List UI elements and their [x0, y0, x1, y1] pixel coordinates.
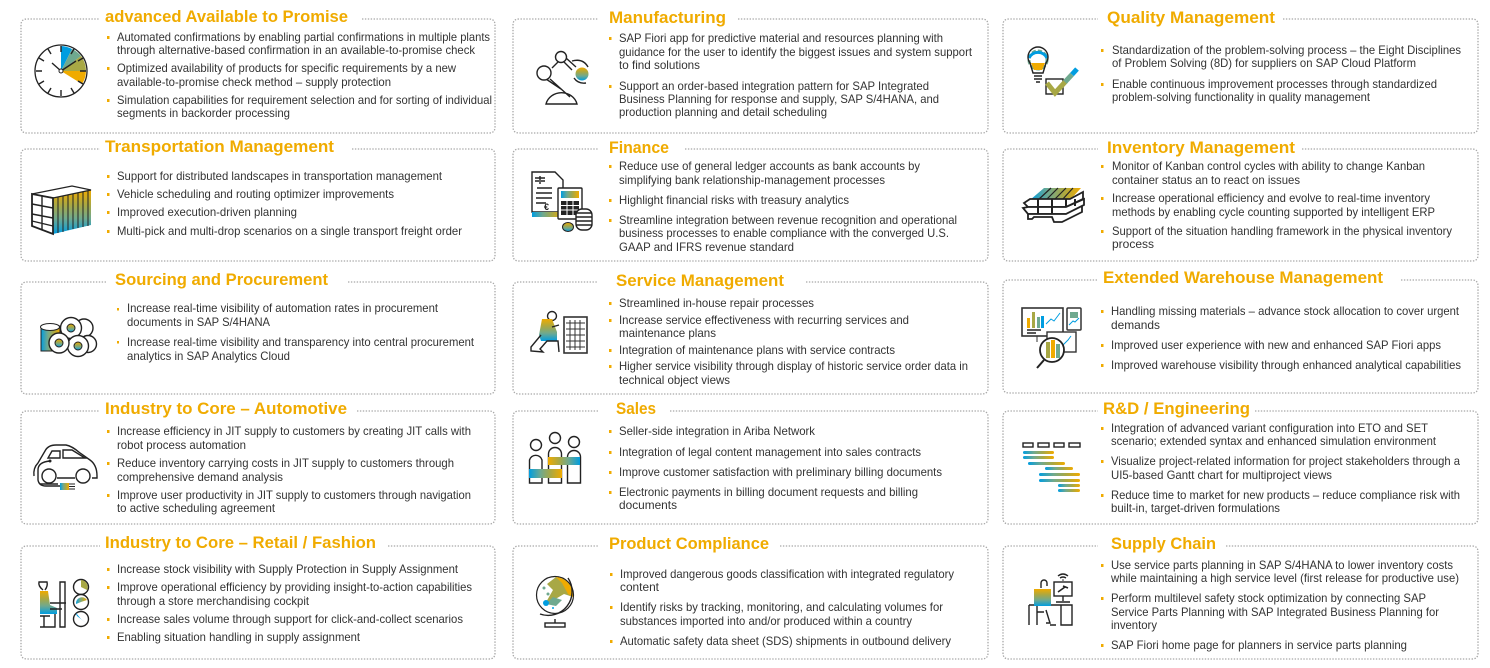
text block: Supply Chain bullets: Service Parts Planning with SAP Integrated Business Planning for [1111, 605, 1439, 619]
text block: Product Compliance bullets: substances imported into and/or produced within a country [620, 614, 912, 628]
text block: Service Management bullets: Increase service effectiveness with recurring services and [619, 313, 909, 327]
icon: technician and server rack [531, 312, 587, 353]
text block: Automotive bullets: to active scheduling agreement [117, 501, 276, 515]
panel: Finance [513, 138, 988, 261]
text block: Sourcing and Procurement bullets [117, 301, 475, 363]
panel: R&D / Engineering [1003, 399, 1478, 524]
text block: Automotive bullets: Improve user productivity in JIT supply to customers through navigation [117, 488, 471, 502]
text block: advanced Available to Promise bullets [107, 30, 492, 120]
text block: Transportation Management bullets: Improved execution-driven planning [117, 205, 297, 219]
icon: clock [35, 45, 87, 97]
panel: Industry to Core – Retail / Fashion [21, 533, 495, 659]
text block: Retail / Fashion bullets: Increase stock visibility with Supply Protection in Supply Assignment [117, 562, 459, 576]
text block: R&D / Engineering bullets [1101, 421, 1460, 515]
text block: Extended Warehouse Management bullets: Improved warehouse visibility through enhanced analytical capabilities [1111, 358, 1461, 372]
heading: Supply Chain: Supply Chain [1111, 534, 1216, 553]
heading: Manufacturing: Manufacturing [609, 8, 726, 27]
text block: Supply Chain bullets: Use service parts planning in SAP S/4HANA to lower inventory costs [1111, 558, 1453, 572]
text block: Sales bullets: Improve customer satisfaction with preliminary billing documents [619, 465, 942, 479]
panel: Supply Chain [1003, 534, 1478, 659]
text block: Extended Warehouse Management bullets: demands [1111, 318, 1160, 332]
text block: Retail / Fashion bullets: Improve operational efficiency by providing insight-to-action capabilities [117, 580, 472, 594]
icon: light bulb and check mark [1028, 47, 1077, 94]
heading: Extended Warehouse Management: Extended Warehouse Management [1103, 268, 1383, 287]
text block: Supply Chain bullets: while maintaining a high service level (first release for productive use) [1110, 571, 1459, 585]
text block: Service Management bullets: Higher service visibility through display of historic service order data in [619, 359, 968, 373]
text block: Transportation Management bullets: Multi-pick and multi-drop scenarios on a single transport freight order [117, 224, 462, 238]
text block: Manufacturing bullets: Support an order-based integration pattern for SAP Integrated [619, 79, 929, 93]
text block: Inventory Management bullets: Monitor of Kanban control cycles with ability to change Kanban [1112, 159, 1425, 173]
icon: material rolls [40, 318, 96, 356]
text block: R&D / Engineering bullets: Visualize project-related information for project stakeholders through a [1111, 454, 1460, 468]
text block: Retail / Fashion bullets [107, 562, 472, 644]
text block: Quality Management bullets: of Problem Solving (8D) for suppliers on SAP Cloud Platform [1112, 56, 1416, 70]
heading: advanced Available to Promise: advanced Available to Promise [105, 7, 348, 26]
text block: Sales bullets: Electronic payments in billing document requests and billing [619, 485, 918, 499]
text block: Sales bullets: Seller-side integration in Ariba Network [619, 424, 816, 438]
text block: Product Compliance bullets: content [620, 580, 660, 594]
heading: Product Compliance: Product Compliance [609, 534, 769, 553]
panel: Product Compliance [513, 534, 988, 659]
panel: Extended Warehouse Management [1003, 268, 1478, 393]
text block: Supply Chain bullets [1101, 558, 1459, 652]
text block: Service Management bullets: Streamlined in-house repair processes [619, 296, 814, 310]
panel: Sales [513, 399, 988, 524]
text block: Sales bullets [609, 424, 942, 512]
heading: Sales: Sales [616, 399, 656, 418]
text block: Retail / Fashion bullets: Increase sales volume through support for click-and-collect scenarios [117, 612, 463, 626]
text block: Finance bullets: business processes to enable compliance with the converged U.S. [619, 226, 949, 240]
heading: Inventory Management: Inventory Management [1107, 138, 1295, 157]
heading: Quality Management: Quality Management [1107, 8, 1275, 27]
text block: Inventory Management bullets: methods by enabling cycle counting supported by intelligent ERP [1112, 205, 1435, 219]
text block: Transportation Management bullets: Vehicle scheduling and routing optimizer improvements [117, 187, 394, 201]
text block: Finance bullets: simplifying bank relationship-management processes [619, 173, 885, 187]
text block: Supply Chain bullets: Perform multilevel safety stock optimization by connecting SAP [1111, 591, 1426, 605]
panel: Manufacturing [513, 8, 988, 133]
text block: Automotive bullets: comprehensive demand analysis [117, 470, 283, 484]
icon: ledger, calculator and coins: € [544, 202, 549, 212]
text block: Extended Warehouse Management bullets: Improved user experience with new and enhanced SAP Fiori apps [1111, 338, 1441, 352]
text block: Finance bullets: Streamline integration between revenue recognition and operational [619, 213, 957, 227]
text block: Service Management bullets [609, 296, 968, 387]
text block: advanced Available to Promise bullets: Simulation capabilities for requirement selection and for sorting of individual [117, 93, 492, 107]
text block: Automotive bullets [107, 424, 471, 515]
heading: Finance: Finance [609, 138, 669, 157]
panel: Industry to Core – Automotive [21, 399, 495, 524]
icon: person at desk with clocks [39, 580, 88, 627]
heading: Transportation Management: Transportation Management [105, 137, 334, 156]
icon: Gantt chart [1023, 443, 1080, 492]
panel: Sourcing and Procurement [21, 270, 495, 394]
text block: Service Management bullets: Integration of maintenance plans with service contracts [619, 343, 895, 357]
text block: Sales bullets: documents [619, 498, 677, 512]
text block: Sourcing and Procurement bullets: Increase real-time visibility of automation rates in procurement [127, 301, 439, 315]
text block: Retail / Fashion bullets: through a store merchandising cockpit [117, 594, 310, 608]
text block: Sourcing and Procurement bullets: analytics in SAP Analytics Cloud [127, 349, 290, 363]
text block: Finance bullets: Highlight financial risks with treasury analytics [619, 193, 849, 207]
icon: stacked pallets [1023, 188, 1084, 222]
text block: Sourcing and Procurement bullets: documents in SAP S/4HANA [127, 315, 270, 329]
text block: Manufacturing bullets: Business Planning for response and supply, SAP S/4HANA, and [619, 92, 939, 106]
text block: Inventory Management bullets: Support of the situation handling framework in the physical inventory [1112, 224, 1452, 238]
text block: Automotive bullets: Increase efficiency in JIT supply to customers by creating JIT calls with [117, 424, 471, 438]
text block: Product Compliance bullets: Improved dangerous goods classification with integrated regulatory [620, 567, 954, 581]
panel: Inventory Management [1003, 138, 1478, 261]
heading: Sourcing and Procurement: Sourcing and Procurement [115, 270, 328, 289]
text block: Manufacturing bullets: production planning and detail scheduling [619, 105, 827, 119]
text block: Quality Management bullets: problem-solving functionality in quality management [1112, 90, 1371, 104]
text block: advanced Available to Promise bullets: segments in backorder processing [117, 106, 290, 120]
text block: Transportation Management bullets: Support for distributed landscapes in transportation management [117, 169, 443, 183]
text block: Manufacturing bullets [609, 31, 973, 119]
heading: R&D / Engineering: R&D / Engineering [1103, 399, 1250, 418]
text block: Product Compliance bullets: Automatic safety data sheet (SDS) shipments in outbound delivery [620, 634, 951, 648]
text block: Quality Management bullets: Standardization of the problem-solving process – the Eight Disciplines [1112, 43, 1461, 57]
text block: Finance bullets [609, 159, 957, 254]
text block: Quality Management bullets [1101, 43, 1461, 104]
text block: Supply Chain bullets: SAP Fiori home page for planners in service parts planning [1111, 638, 1407, 652]
text block: advanced Available to Promise bullets: available-to-promise check method – supply protection [117, 75, 391, 89]
text block: Finance bullets: GAAP and IFRS revenue standard [619, 240, 794, 254]
text block: R&D / Engineering bullets: Reduce time to market for new products – reduce compliance risk with [1111, 488, 1460, 502]
icon: electric car [34, 445, 97, 490]
text block: Quality Management bullets: Enable continuous improvement processes through standardized [1112, 77, 1437, 91]
text block: R&D / Engineering bullets: built-in, target-driven formulations [1111, 501, 1280, 515]
panel: advanced Available to Promise [21, 7, 495, 133]
text block: R&D / Engineering bullets: scenario; extended syntax and enhanced simulation environment [1111, 434, 1437, 448]
text block: Product Compliance bullets: Identify risks by tracking, monitoring, and calculating volumes for [620, 600, 943, 614]
icon: ledger, calculator and coins [532, 172, 592, 232]
text block: Service Management bullets: maintenance plans [619, 326, 716, 340]
text block: Inventory Management bullets: container status an to react on issues [1112, 173, 1300, 187]
panel: Quality Management [1003, 8, 1478, 133]
text block: advanced Available to Promise bullets: through alternative-based confirmation in an available-to-promise check [117, 43, 476, 57]
text block: Supply Chain bullets: inventory [1111, 618, 1157, 632]
text block: Inventory Management bullets: Increase operational efficiency and evolve to real-time inventory [1112, 191, 1430, 205]
icon: planner at workstation [1029, 574, 1072, 625]
text block: advanced Available to Promise bullets: Optimized availability of products for specific requirements by a new [117, 61, 456, 75]
text block: R&D / Engineering bullets: Integration of advanced variant configuration into ETO and SET [1111, 421, 1429, 435]
text block: Automotive bullets: robot process automation [117, 438, 246, 452]
text block: Manufacturing bullets: SAP Fiori app for predictive material and resources planning with [619, 31, 943, 45]
text block: R&D / Engineering bullets: UI5-based Gantt chart for multiproject views [1111, 468, 1332, 482]
text block: Sales bullets: Integration of legal content management into sales contracts [619, 445, 921, 459]
text block: Inventory Management bullets [1101, 159, 1452, 251]
heading: Service Management: Service Management [616, 271, 784, 290]
text block: Automotive bullets: Reduce inventory carrying costs in JIT supply to customers through [117, 456, 454, 470]
panel: Transportation Management [21, 137, 495, 261]
heading: Industry to Core – Automotive: Industry to Core – Automotive [105, 399, 347, 418]
text block: Manufacturing bullets: to find solutions [619, 58, 700, 72]
text block: Retail / Fashion bullets: Enabling situation handling in supply assignment [117, 630, 361, 644]
text block: Extended Warehouse Management bullets [1101, 304, 1461, 372]
text block: Transportation Management bullets [107, 169, 462, 238]
text block: advanced Available to Promise bullets: Automated confirmations by enabling partial confirmations in multiple plants [117, 30, 490, 44]
text block: Finance bullets: Reduce use of general ledger accounts as bank accounts by [619, 159, 920, 173]
icon: three people [529, 432, 580, 483]
text block: Service Management bullets: technical object views [619, 373, 730, 387]
icon: robot arm [537, 52, 588, 104]
heading: Industry to Core – Retail / Fashion: Industry to Core – Retail / Fashion [105, 533, 376, 552]
text block: Product Compliance bullets [610, 567, 954, 648]
icon: dashboards and magnifier [1022, 308, 1081, 368]
text block: Extended Warehouse Management bullets: Handling missing materials – advance stock allocation to cover urgent [1111, 304, 1460, 318]
text block: Inventory Management bullets: process [1112, 237, 1154, 251]
panel: Service Management [513, 271, 988, 394]
icon: globe [536, 576, 574, 627]
text block: Manufacturing bullets: guidance for the user to identify the biggest issues and system support [619, 45, 973, 59]
text block: Sourcing and Procurement bullets: Increase real-time visibility and transparency into central procurement [127, 335, 475, 349]
icon: shipping container [32, 186, 91, 234]
